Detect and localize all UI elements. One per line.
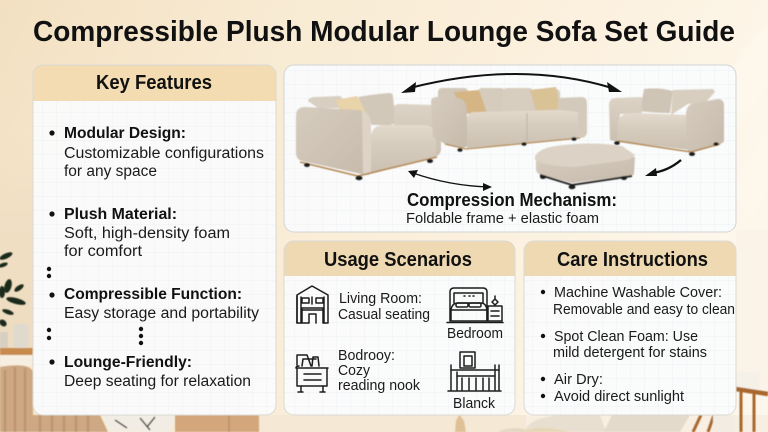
arrow: lower double-headed xyxy=(408,170,492,191)
feature: modular design: for any space xyxy=(64,163,157,180)
feature: compressible function: Compressible Function: xyxy=(64,286,242,303)
icon: bed with nightstand xyxy=(447,288,503,322)
panel: compression mechanism xyxy=(284,65,736,232)
text: bodrooy: Cozy xyxy=(338,363,371,379)
text: bodrooy xyxy=(338,348,421,394)
caption: foldable frame: Foldable frame + elastic foam xyxy=(406,210,599,227)
text: bodrooy: reading nook xyxy=(338,378,421,394)
feature: plush material: Soft, high-density foam xyxy=(64,225,230,242)
feature: plush material xyxy=(49,206,230,260)
key features header band xyxy=(33,65,276,101)
stray dots lower xyxy=(47,327,143,345)
feature: compressible function: Easy storage and portability xyxy=(64,305,259,322)
text: living room xyxy=(338,291,430,323)
panel: usage scenarios xyxy=(284,241,515,415)
feature: lounge friendly xyxy=(49,354,251,390)
care item: spot clean xyxy=(541,329,707,361)
feature: lounge friendly: Deep seating for relaxation xyxy=(64,373,251,390)
feature: modular design: Modular Design: xyxy=(64,125,186,142)
arrow: top curved double-headed xyxy=(401,74,622,93)
icon: living room house xyxy=(297,286,328,323)
decoration: knitted blanket xyxy=(0,365,108,432)
sofa: ottoman xyxy=(535,144,635,189)
care header band xyxy=(524,241,736,276)
care item: air dry xyxy=(541,372,684,405)
panel: key features xyxy=(33,65,276,415)
icon: framed picture and bed xyxy=(448,352,501,391)
text: bedroom: Bedroom xyxy=(447,326,503,342)
heading: key features: Key Features xyxy=(96,72,212,94)
arrow: right curved xyxy=(645,160,681,176)
decoration: shelf with jars xyxy=(0,324,33,366)
care item: machine washable: Machine Washable Cover: xyxy=(554,285,722,301)
decoration: sofa pillows and wooden chair xyxy=(520,372,768,432)
care item: spot clean: mild detergent for stains xyxy=(553,345,707,361)
icon: nightstand with books xyxy=(296,355,328,392)
title: Compressible Plush Modular Lounge Sofa Set Guide xyxy=(33,16,735,48)
usage header band xyxy=(284,241,515,276)
panel: care instructions xyxy=(524,241,736,415)
feature: plush material: Plush Material: xyxy=(64,206,177,223)
care item: machine washable: Removable and easy to clean xyxy=(553,302,735,318)
sofa: middle three-seater xyxy=(431,87,587,152)
feature: lounge friendly: Lounge-Friendly: xyxy=(64,354,192,371)
heading: care instructions: Care Instructions xyxy=(557,249,708,271)
loveseat back cushions xyxy=(640,88,715,115)
sofa: left armchair xyxy=(296,93,441,180)
decoration: candle and tray xyxy=(455,415,524,432)
decoration: potted plant xyxy=(0,251,26,328)
sofa: right loveseat xyxy=(609,88,724,156)
left armchair back cushions xyxy=(308,93,396,125)
heading: usage scenarios: Usage Scenarios xyxy=(324,249,472,271)
feature: plush material: for comfort xyxy=(64,243,143,260)
decoration: patterned and tan cushions xyxy=(102,415,259,432)
feature: modular design xyxy=(49,125,264,180)
text: living room: Casual seating xyxy=(338,307,430,323)
care item: spot clean: Spot Clean Foam: Use xyxy=(554,329,698,345)
stray dots xyxy=(47,267,51,278)
care item: air dry: Air Dry: xyxy=(554,372,603,388)
text: living room: Living Room: xyxy=(339,291,422,307)
text: blanck: Blanck xyxy=(453,396,496,412)
text: bodrooy: Bodrooy: xyxy=(338,348,395,364)
heading: compression mechanism: Compression Mechanism: xyxy=(407,189,617,210)
middle sofa back cushions xyxy=(438,87,560,114)
care item: machine washable xyxy=(541,285,735,318)
feature: compressible function xyxy=(49,286,259,322)
feature: modular design: Customizable configurations xyxy=(64,145,264,162)
care item: air dry: Avoid direct sunlight xyxy=(554,389,684,405)
